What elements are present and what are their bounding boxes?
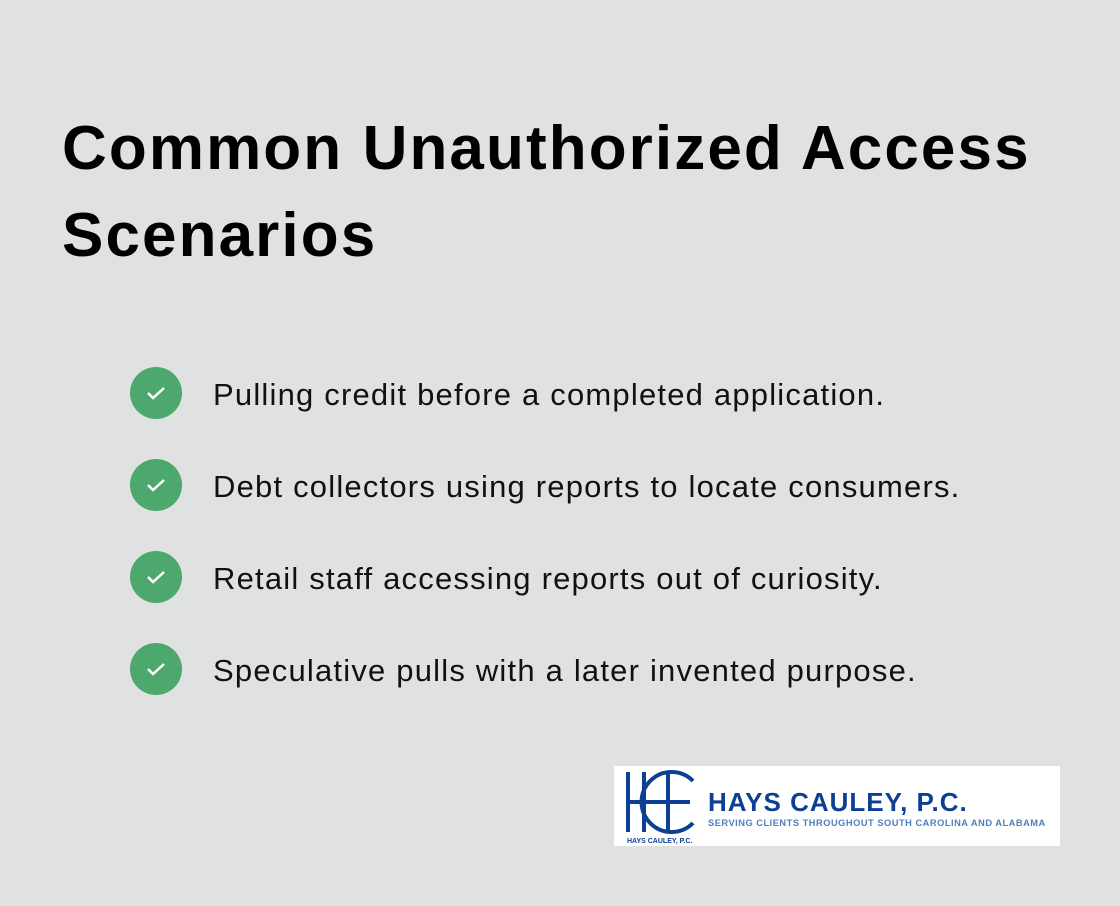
title: Scenarios bbox=[62, 201, 377, 270]
logo bbox=[614, 766, 1060, 846]
item 2: Debt collectors using reports to locate consumers. bbox=[213, 469, 960, 504]
title bbox=[62, 114, 1031, 270]
item 4: Speculative pulls with a later invented purpose. bbox=[213, 653, 917, 688]
list bbox=[130, 367, 960, 695]
company name: HAYS CAULEY, P.C. bbox=[708, 787, 968, 817]
item 2 bbox=[130, 459, 960, 511]
small name: HAYS CAULEY, P.C. bbox=[627, 838, 692, 845]
item 3 bbox=[130, 551, 883, 603]
item 4 bbox=[130, 643, 917, 695]
title: Common Unauthorized Access bbox=[62, 114, 1031, 183]
tagline: SERVING CLIENTS THROUGHOUT SOUTH CAROLINA AND ALABAMA bbox=[708, 818, 1046, 828]
icon: HC monogram bbox=[628, 771, 693, 833]
item 1 bbox=[130, 367, 885, 419]
item 1: Pulling credit before a completed application. bbox=[213, 377, 885, 412]
item 3: Retail staff accessing reports out of curiosity. bbox=[213, 561, 883, 596]
